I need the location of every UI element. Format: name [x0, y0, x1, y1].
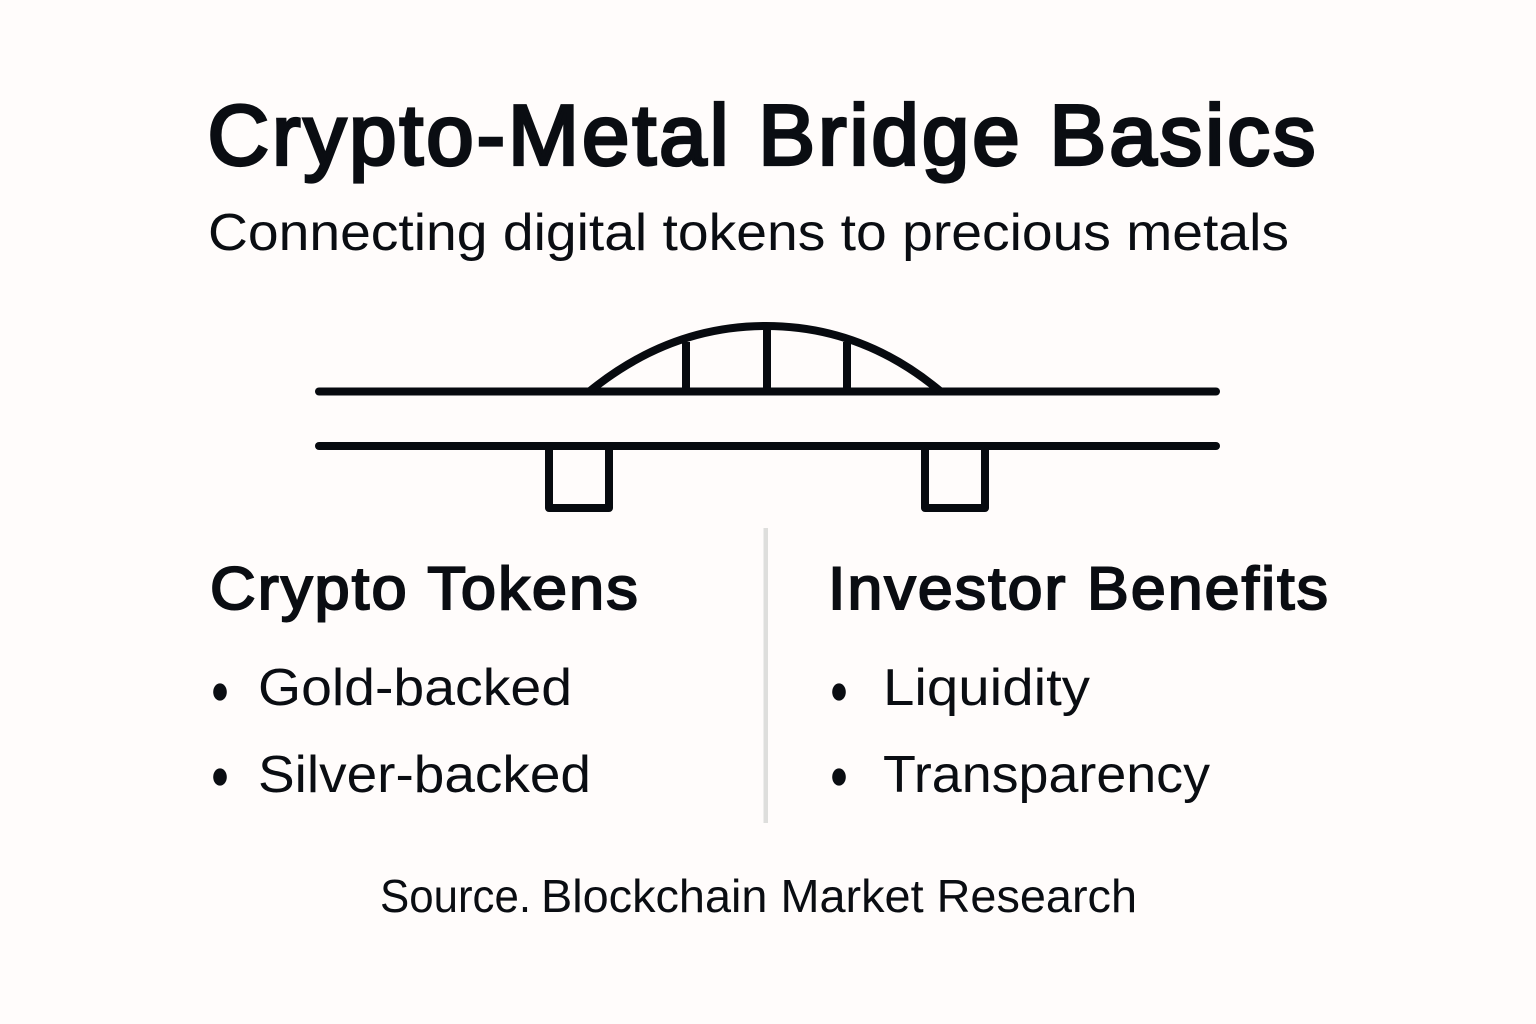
panel: crypto tokens [210, 555, 640, 804]
panel: investor benefits [828, 555, 1330, 804]
column divider [764, 528, 768, 823]
bullet: liquidity: Liquidity [883, 659, 1090, 717]
bridge arch [590, 326, 940, 391]
left pier [549, 446, 609, 508]
source note: Blockchain Market Research [541, 870, 1137, 922]
heading: investor benefits: Investor Benefits [828, 555, 1330, 622]
bullet: gold-backed: Gold-backed [258, 659, 572, 717]
bullet: silver-backed: Silver-backed [258, 746, 591, 804]
bridge lower deck [319, 442, 1216, 450]
bridge upper deck [319, 388, 1216, 396]
source note: Source. [380, 870, 531, 922]
bridge hangers [686, 326, 847, 391]
right pier [925, 446, 985, 508]
title: Crypto-Metal Bridge Basics [208, 88, 1318, 184]
heading: crypto tokens: Crypto Tokens [210, 555, 640, 622]
subtitle: Connecting digital tokens to precious metals [208, 204, 1289, 262]
bullet: transparency: Transparency [883, 746, 1210, 804]
icon: bridge [319, 326, 1216, 508]
